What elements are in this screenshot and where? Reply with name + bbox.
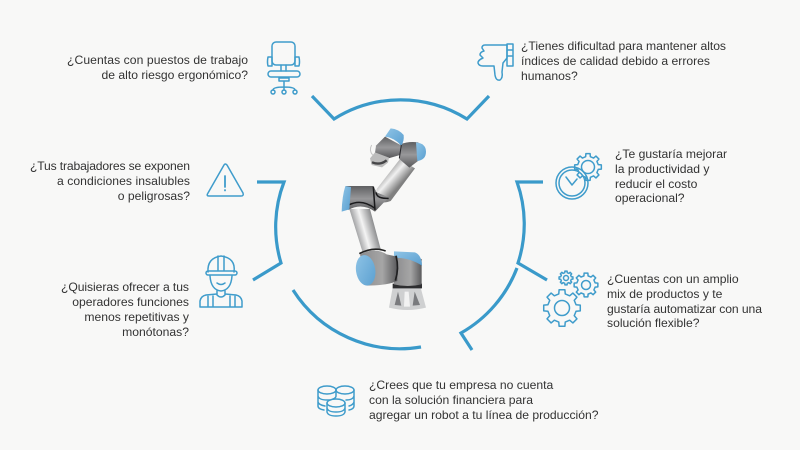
text: unhealthy conditions: o peligrosas? (118, 189, 190, 203)
robot forearm tube (375, 159, 415, 202)
text: productivity: operacional? (615, 191, 685, 205)
text: quality (521, 39, 726, 83)
text: repetitive tasks: monótonas? (122, 325, 189, 339)
text: quality: humanos? (521, 69, 578, 83)
icon: stacks of coins (318, 386, 354, 416)
icon: clock and gear (556, 154, 601, 199)
text: repetitive tasks (61, 280, 190, 339)
icon: thumbs down (478, 44, 513, 80)
text: financing: con la solución financiera para (369, 393, 533, 407)
text: product mix (607, 272, 762, 330)
text: repetitive tasks: operadores funciones (72, 295, 189, 309)
text: productivity (615, 147, 727, 205)
robot shoulder (354, 249, 398, 287)
text: ergonomic risk: ¿Cuentas con puestos de trabajo (67, 53, 248, 67)
text: financing (369, 378, 599, 422)
ring bracket: right (517, 182, 547, 280)
ring bracket: bottom left (293, 290, 421, 349)
ring bracket: bottom right (461, 268, 517, 350)
robot arm (342, 128, 426, 310)
ring bracket: top (312, 96, 489, 119)
text: repetitive tasks: ¿Quisieras ofrecer a tus (61, 280, 189, 294)
robot base (389, 251, 426, 310)
robot wrist (370, 128, 426, 168)
text: quality: ¿Tienes dificultad para mantener altos (521, 39, 726, 53)
icon: worker with hard hat (200, 256, 242, 307)
text: productivity: reducir el costo (615, 177, 698, 191)
icon: warning triangle (207, 164, 243, 196)
text: ergonomic risk: de alto riesgo ergonómico? (102, 68, 248, 82)
text: repetitive tasks: menos repetitivas y (84, 310, 190, 324)
text: product mix: gustaría automatizar con una (607, 302, 762, 316)
text: product mix: mix de productos y te (607, 287, 723, 301)
text: unhealthy conditions: a condiciones insalubles (57, 174, 190, 188)
text: unhealthy conditions: ¿Tus trabajadores se exponen (30, 159, 190, 173)
text: productivity: la productividad y (615, 162, 710, 176)
icon: office chair (268, 42, 300, 94)
icon: three gears (544, 271, 598, 326)
text: financing: agregar un robot a tu línea de producción? (369, 408, 599, 422)
text: quality: índices de calidad debido a errores (521, 54, 710, 68)
text: unhealthy conditions (30, 159, 190, 203)
ring bracket: left (253, 182, 284, 280)
robot lower arm tube (349, 209, 381, 252)
text: financing: ¿Crees que tu empresa no cuenta (369, 378, 553, 392)
text: product mix: solución flexible? (607, 316, 700, 330)
robot elbow (342, 186, 389, 212)
text: ergonomic risk (67, 53, 248, 82)
text: productivity: ¿Te gustaría mejorar (615, 147, 727, 161)
text: product mix: ¿Cuentas con un amplio (607, 272, 739, 286)
